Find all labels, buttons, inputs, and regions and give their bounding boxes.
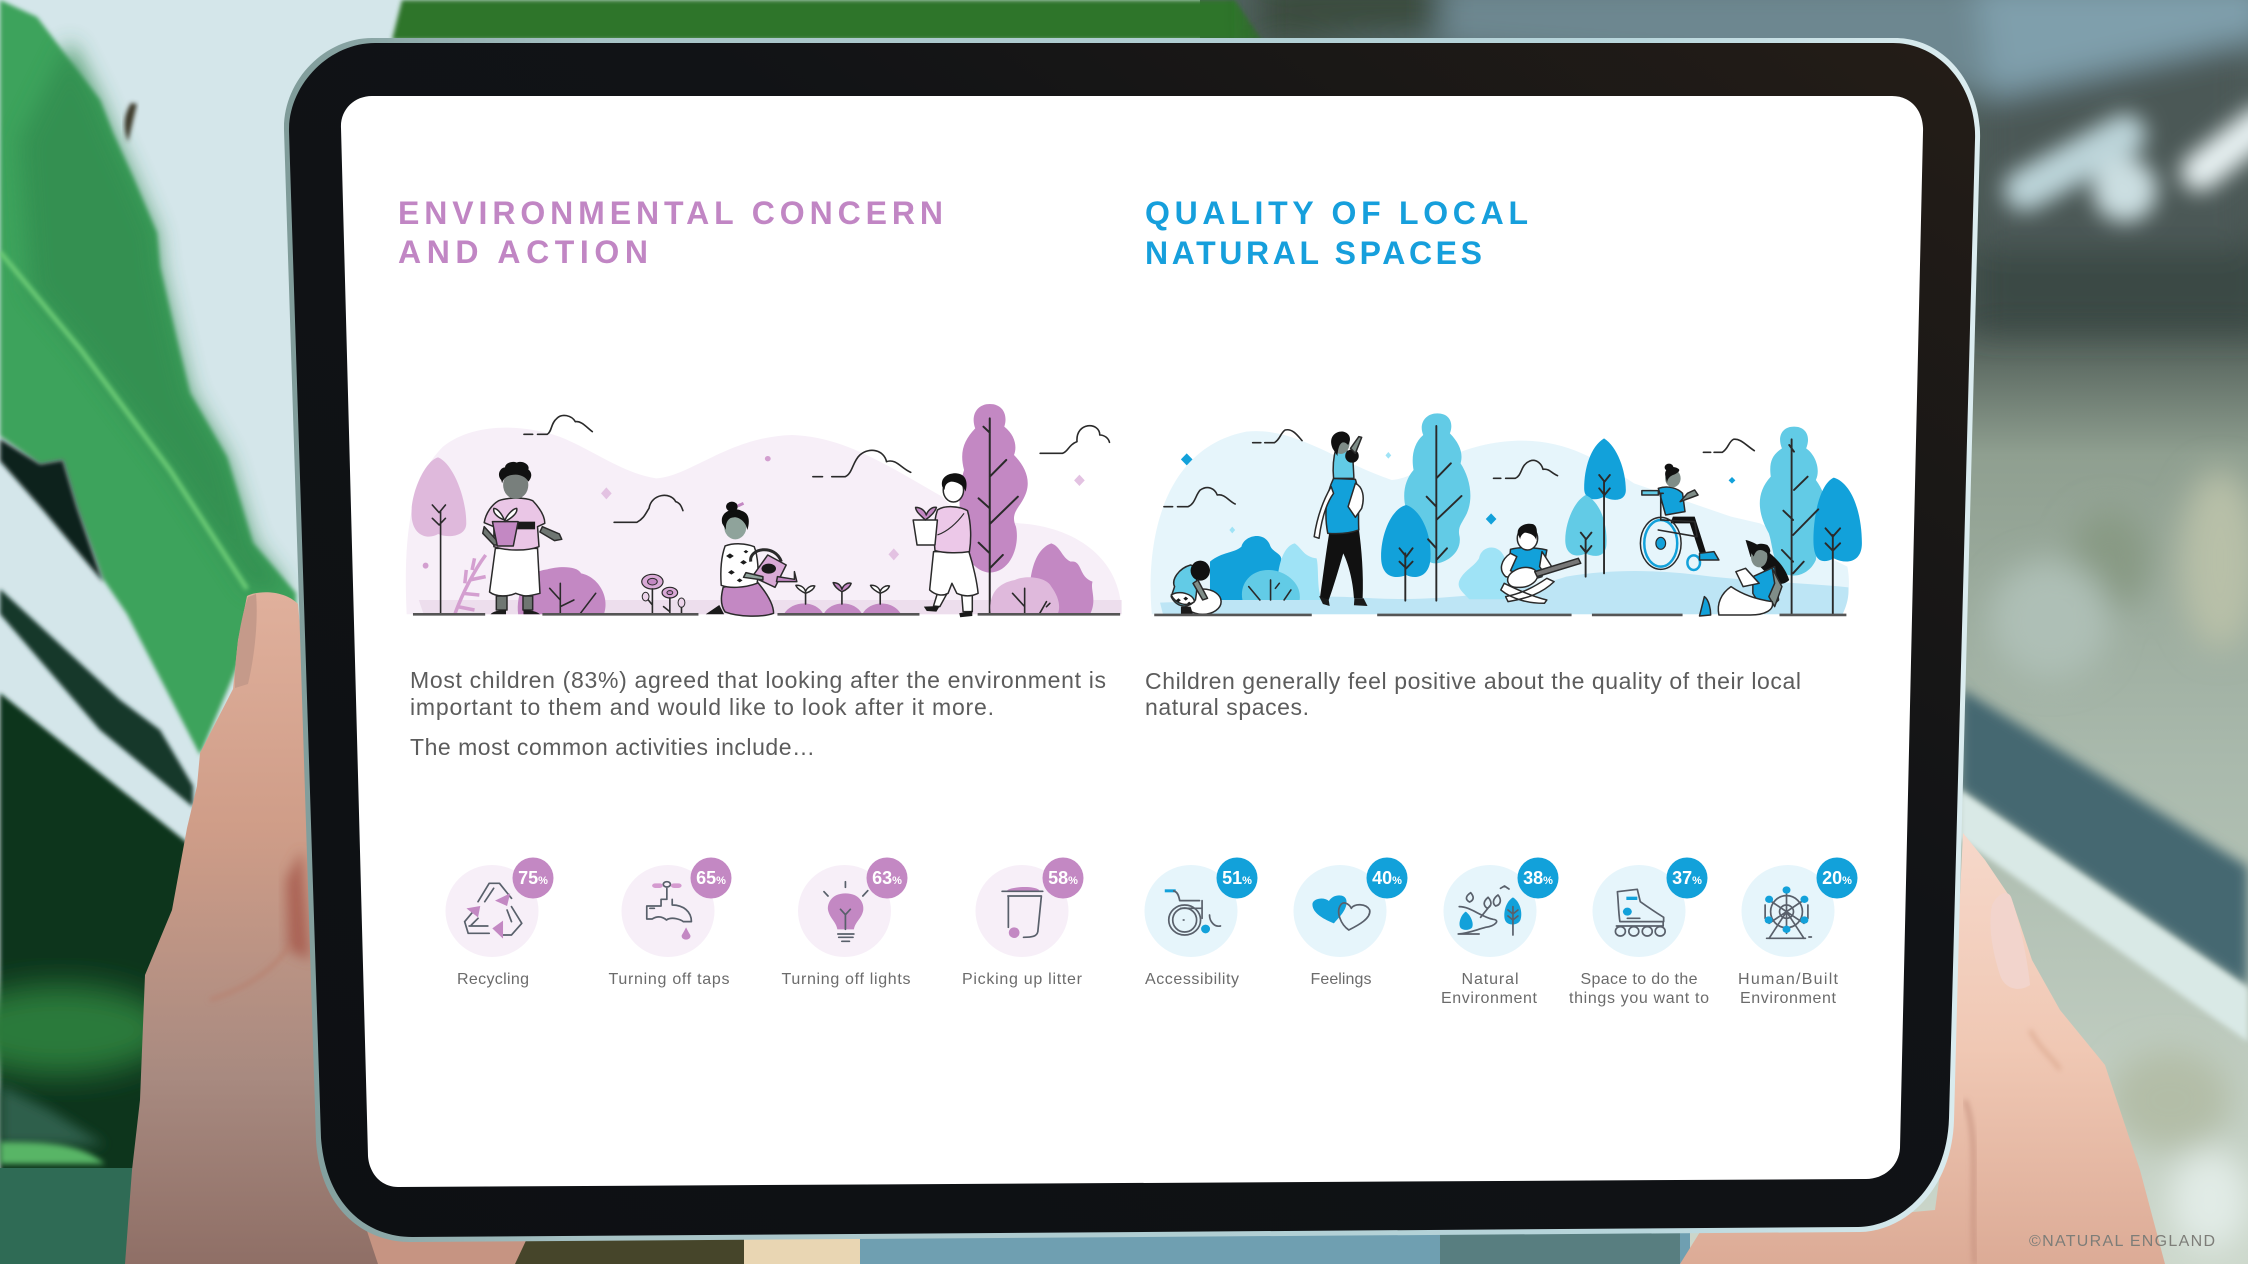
stat: natural environment 38%: 38% [1523,868,1553,888]
arms [483,527,562,545]
thumb nail [1990,893,2030,989]
badge [1666,858,1708,898]
stat: space to do the things you want to 37%: 37% [1672,868,1702,888]
stat: accessibility 51%: Accessibility [1145,971,1239,988]
red crease [286,850,310,960]
background: right bokeh highlights [2025,125,2248,222]
large pale blue tree [1404,413,1470,563]
background: lower left dark foliage [0,693,190,1264]
adult with child on shoulders [1314,432,1368,606]
badge [866,858,908,898]
stat: space to do the things you want to 37%: things you want to [1569,990,1709,1007]
child on shoulders [1333,448,1354,478]
stat: natural environment 38% [1441,858,1558,1007]
dark blue tree [1381,505,1431,577]
background: lower foliage tones [0,985,170,1264]
pot [913,520,937,545]
badge [1042,858,1084,898]
badge [690,858,732,898]
text: quality body: Children generally feel positive about the quality of their local [1145,668,1801,694]
toddler with ball [1171,561,1221,614]
small dot [1729,477,1735,484]
icon: bin [1002,887,1043,938]
text: quality body [1145,668,1801,720]
tablet screen [341,96,1923,1187]
icon: wheelchair [1165,889,1220,935]
stat: turning off taps 65% [608,858,732,988]
badge [1366,858,1408,898]
stat: turning off taps 65%: Turning off taps [608,971,730,988]
copyright credit: ©NATURAL ENGLAND [2029,1233,2215,1250]
stat: space to do the things you want to 37%: Space to do the [1580,971,1698,988]
shirt [1508,548,1547,579]
bare arms [1314,487,1334,538]
fern [455,555,486,613]
stat: human/built environment 20%: Human/Built [1738,971,1839,988]
thumb nail shade [235,594,257,688]
text: environmental concern body [410,667,1106,760]
shoes [491,610,540,614]
side trees [1565,438,1626,577]
shirt [1326,478,1359,534]
tablet bezel [289,43,1975,1237]
hill background [406,428,1122,614]
heading: environmental concern [398,195,943,270]
icon: ferris wheel [1765,886,1811,938]
heading: quality of local natural spaces: NATURAL SPACES [1145,235,1482,271]
stat: turning off taps 65%: 65% [696,868,726,888]
girl reading [1700,540,1789,616]
stat: turning off lights 63%: 63% [872,868,902,888]
seedling mounds [784,583,901,614]
clear blue bush [1459,547,1507,599]
badge [1816,858,1858,898]
icon: recycling [465,883,522,939]
stat: human/built environment 20% [1738,858,1858,1007]
stat: recycling 75%: 75% [518,868,548,888]
background: leaf midrib [0,252,247,589]
background: top right blur [1260,0,2248,330]
arms [1501,552,1552,580]
child holding plant [913,473,978,617]
left bushes [1210,536,1321,600]
head and hair [1517,527,1538,550]
background: lower right mottled area [2110,1050,2248,1250]
stat: space to do the things you want to 37% [1569,858,1709,1007]
child with plant pot [483,462,562,614]
trousers [1320,528,1363,600]
illustration: children gardening [406,404,1122,617]
hill background [1151,431,1849,614]
background: leaf tip sliver [125,103,137,142]
guitarist [1501,524,1581,603]
background: top centre leaf [392,0,1262,40]
flowers [642,574,685,614]
text: quality body: natural spaces. [1145,694,1309,720]
skirt and legs [721,580,774,616]
sparkles [1181,453,1496,525]
bush [518,567,606,614]
kneeling girl with watering can [706,502,797,616]
blouse [721,544,758,587]
icon: natural environment [1458,886,1521,935]
trousers [930,552,978,596]
heading: environmental concern: ENVIRONMENTAL CONCERN [398,195,943,231]
stat: turning off lights 63% [782,858,910,988]
background: pale sill strip [1960,790,2248,1042]
text: environmental concern body: The most common activities include… [410,734,815,760]
clouds [1164,430,1754,507]
shirt [934,507,971,553]
badge [512,858,554,898]
head and hair [943,478,964,502]
background: dark stem stripes [0,439,193,807]
stat: natural environment 38%: Natural [1462,971,1518,988]
stat: turning off lights 63%: Turning off lights [782,971,910,988]
shoes [1319,596,1368,606]
icon: bulb [824,882,868,941]
tablet [284,38,1980,1242]
head and hair [724,514,746,539]
shirt [484,498,545,550]
neck and head [503,471,528,499]
stat: feelings 40% [1294,858,1408,988]
text: environmental concern body: important to them and would like to look after it more. [410,694,994,720]
right bushes [990,543,1093,614]
badge [1518,858,1558,898]
stat: human/built environment 20%: 20% [1822,868,1852,888]
background: dark side of leaf [20,40,290,592]
stat: picking up litter 58%: Picking up litter [962,971,1083,988]
big pink tree [959,404,1028,573]
trunks [1399,426,1462,601]
stat: recycling 75%: Recycling [457,971,529,988]
icon: roller skate [1615,889,1665,936]
badge [1216,858,1258,898]
left hand [125,592,530,1264]
heading: quality of local natural spaces [1145,195,1528,271]
pale tree [412,457,466,614]
big tree trunk and branches [979,418,1018,614]
heading: quality of local natural spaces: QUALITY OF LOCAL [1145,195,1528,231]
stat: human/built environment 20%: Environment [1740,990,1837,1007]
sash [517,522,535,529]
right hand [1680,833,2165,1264]
pot [492,522,518,546]
dots [423,456,771,569]
ground band [1160,571,1849,614]
stat: recycling 75% [446,858,554,988]
ground band [419,600,1122,614]
clouds [524,415,1109,522]
tablet edge [284,38,1980,1242]
right trees [1760,427,1862,614]
stat: accessibility 51% [1144,858,1258,988]
illustration: children in local nature [1151,413,1862,616]
background: below-tablet blocks [500,1225,1690,1264]
sparkles [601,475,1085,560]
stat: picking up litter 58% [962,858,1084,988]
guitar [1508,567,1538,587]
stat: natural environment 38%: Environment [1441,990,1538,1007]
ground lines [1154,614,1846,616]
background: big left leaf [0,0,296,755]
stat: feelings 40%: 40% [1372,868,1402,888]
background: dark teal windowsill band [1960,688,2248,988]
heading: environmental concern: AND ACTION [398,234,648,270]
legs [496,596,533,610]
crossed legs [1501,578,1554,603]
icon: hearts [1312,895,1370,930]
watering can [751,550,781,562]
stat: picking up litter 58%: 58% [1048,868,1078,888]
stat: accessibility 51%: 51% [1222,868,1252,888]
trousers [490,548,540,596]
wheelchair reader [1640,464,1719,570]
stat: feelings 40%: Feelings [1310,971,1372,988]
text: environmental concern body: Most children (83%) agreed that looking after the environment is [410,667,1106,693]
ground lines [413,613,1120,616]
pale sparkles [1229,452,1391,533]
legs and shoes [934,593,972,612]
icon: tap [647,882,691,940]
